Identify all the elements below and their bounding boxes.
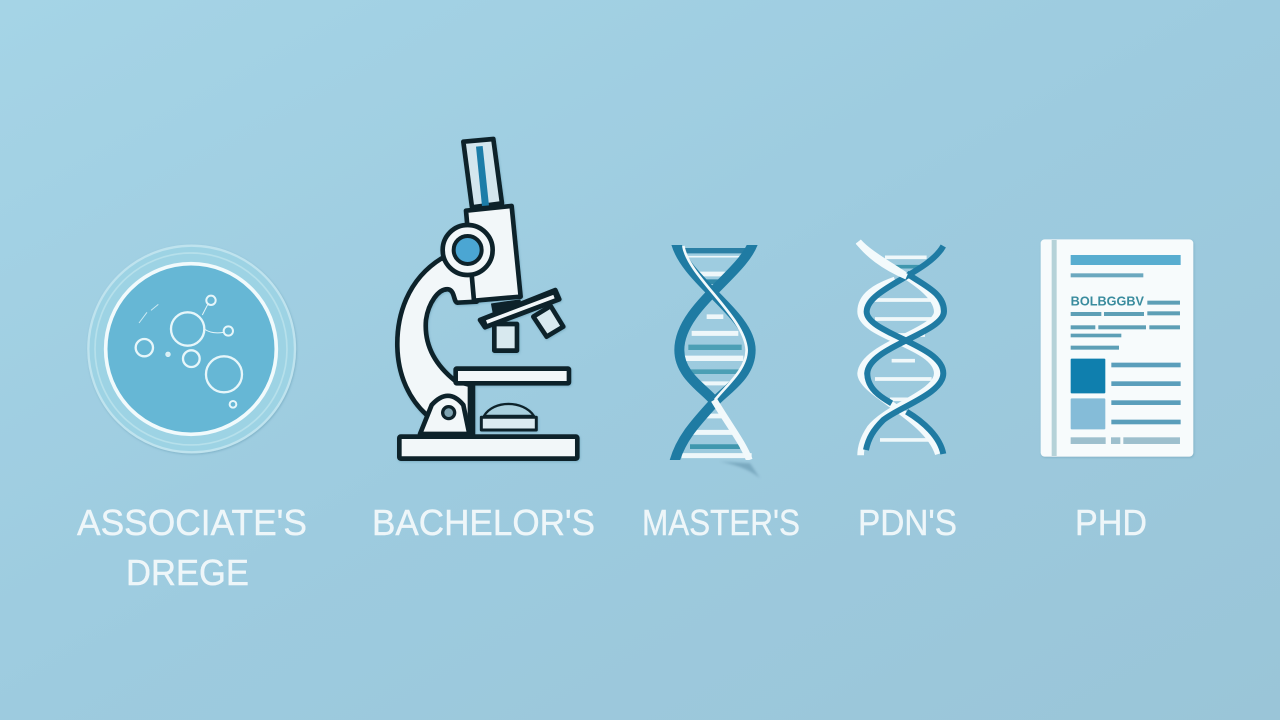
foot (420, 396, 469, 434)
document title: BOLBGGBV (1071, 294, 1145, 308)
arm (397, 258, 477, 433)
blue strand A (866, 246, 943, 450)
foot knob (443, 407, 455, 419)
white strand B (861, 280, 937, 455)
light figure (1071, 398, 1105, 429)
infographic canvas (0, 0, 1195, 586)
blue strand B (867, 273, 944, 454)
icon: petri dish (88, 246, 295, 452)
body lines (1071, 301, 1180, 350)
column (467, 383, 479, 435)
rungs (682, 251, 752, 456)
dark figure (1071, 359, 1105, 393)
label: master's: MASTER'S (642, 502, 800, 543)
base (399, 437, 577, 459)
dish rim (88, 246, 295, 452)
dish culture surface (106, 264, 276, 434)
icon: DNA helix two (858, 242, 944, 455)
stage (456, 369, 569, 383)
eyepiece (463, 139, 502, 207)
condenser (481, 417, 536, 430)
icon: DNA helix one (674, 240, 760, 478)
revolving nosepiece (480, 290, 559, 327)
page (1041, 239, 1193, 457)
focus ring (443, 225, 493, 275)
strand right (674, 240, 751, 463)
header bar (1071, 255, 1181, 265)
lens (454, 236, 482, 264)
condenser dome (484, 404, 534, 416)
nosepiece highlight (487, 297, 554, 322)
spine (1052, 240, 1057, 456)
label: associate's degree: DREGE (126, 552, 249, 593)
cells (136, 296, 242, 408)
body tube (466, 206, 521, 301)
label: bachelor's: BACHELOR'S (372, 502, 595, 543)
label: pdn's: PDN'S (858, 502, 957, 543)
cast shadow (720, 462, 760, 478)
rungs (872, 257, 933, 440)
left objective (494, 324, 517, 351)
figure captions (1111, 363, 1181, 424)
nosepiece connector (492, 300, 520, 317)
strand left (679, 240, 754, 403)
white top overlay (858, 242, 907, 277)
label: associate's degree: ASSOCIATE'S (77, 502, 307, 543)
icon: research paper (1041, 239, 1193, 457)
white highlights (683, 246, 747, 400)
footer lines (1071, 437, 1180, 444)
label: phd: PHD (1075, 502, 1147, 543)
right objective (533, 306, 563, 337)
label: associate's degree (77, 502, 307, 593)
icon: microscope (397, 139, 577, 459)
white strand A (858, 242, 938, 454)
rim inner band (95, 253, 287, 445)
subheader line (1071, 273, 1143, 277)
eyepiece stripe (476, 146, 489, 206)
